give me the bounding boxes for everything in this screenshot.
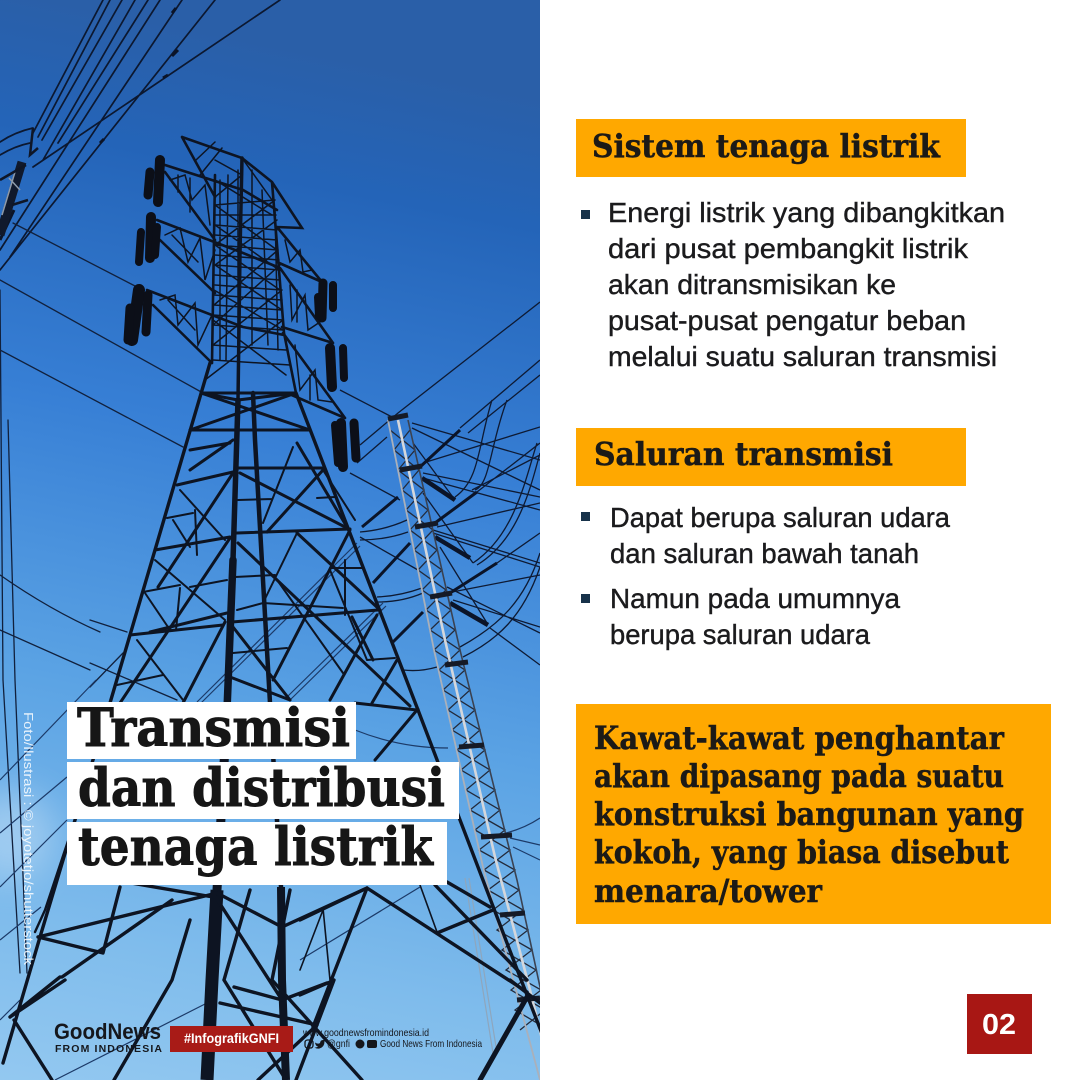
small tower at top left <box>0 128 38 235</box>
bullet text: pusat-pusat pengatur beban <box>608 305 966 336</box>
social media links: www.goodnewsfromindonesia.id <box>302 1027 429 1039</box>
heading bar: Saluran transmisi <box>594 435 893 473</box>
callout: menara/tower: kokoh, yang biasa disebut <box>594 833 1009 871</box>
bullet one: Dapat berupa saluran udara <box>610 502 951 533</box>
icon: facebook <box>356 1040 364 1048</box>
hashtag badge: #InfografikGNFI <box>184 1030 279 1046</box>
page number <box>967 994 1032 1054</box>
bullet text: Energi listrik yang dibangkitkan <box>608 197 1005 228</box>
title block <box>67 698 459 885</box>
tower main legs <box>3 363 560 1080</box>
tower head and arms <box>147 137 345 418</box>
social media links <box>302 1027 482 1050</box>
callout: menara/tower: Kawat-kawat penghantar <box>594 719 1005 757</box>
page number: 02 <box>982 1009 1016 1041</box>
icon: twitter <box>314 1040 326 1049</box>
title block: Transmisi <box>77 698 350 759</box>
bullet text: dari pusat pembangkit listrik <box>608 233 968 264</box>
hashtag badge <box>170 1026 293 1052</box>
heading bar: Sistem tenaga listrik <box>592 127 941 165</box>
section: Sistem tenaga listrik <box>576 119 1005 372</box>
social media links: Good News From Indonesia <box>380 1038 482 1050</box>
callout: menara/tower: konstruksi bangunan yang <box>594 795 1024 833</box>
bullet one: dan saluran bawah tanah <box>610 538 919 569</box>
tower centre post <box>207 158 286 1080</box>
bullet two <box>581 583 901 650</box>
callout: menara/tower: menara/tower <box>594 872 823 910</box>
logo: GoodNews From Indonesia: GoodNews <box>54 1019 161 1044</box>
photo: transmission tower against blue sky <box>0 0 560 1080</box>
icon: youtube <box>367 1040 377 1048</box>
callout: menara/tower <box>576 704 1051 924</box>
tower lower bracing <box>120 393 417 760</box>
bullet two: Namun pada umumnya <box>610 583 901 614</box>
heading bar <box>576 119 966 177</box>
bullet two: berupa saluran udara <box>610 619 871 650</box>
bullet text: melalui suatu saluran transmisi <box>608 341 997 372</box>
title block: tenaga listrik <box>78 817 434 878</box>
callout: menara/tower: akan dipasang pada suatu <box>594 757 1004 795</box>
social media links: @gnfi <box>327 1038 350 1050</box>
section: Saluran transmisi <box>576 428 966 650</box>
photo credit: Foto/Ilustrasi : © joyotetjo/shutterstock <box>21 712 36 966</box>
logo: GoodNews From Indonesia <box>54 1019 162 1055</box>
main lattice tower <box>3 137 560 1080</box>
thin lattice mast at right <box>387 412 540 1080</box>
insulators <box>128 160 356 467</box>
logo: GoodNews From Indonesia: FROM INDONESIA <box>55 1043 162 1055</box>
bullet text: akan ditransmisikan ke <box>608 269 896 300</box>
bullet one <box>581 502 951 569</box>
heading bar <box>576 428 966 486</box>
icon: instagram <box>305 1040 313 1048</box>
title block: dan distribusi <box>78 758 445 819</box>
bullet text <box>581 197 1005 372</box>
